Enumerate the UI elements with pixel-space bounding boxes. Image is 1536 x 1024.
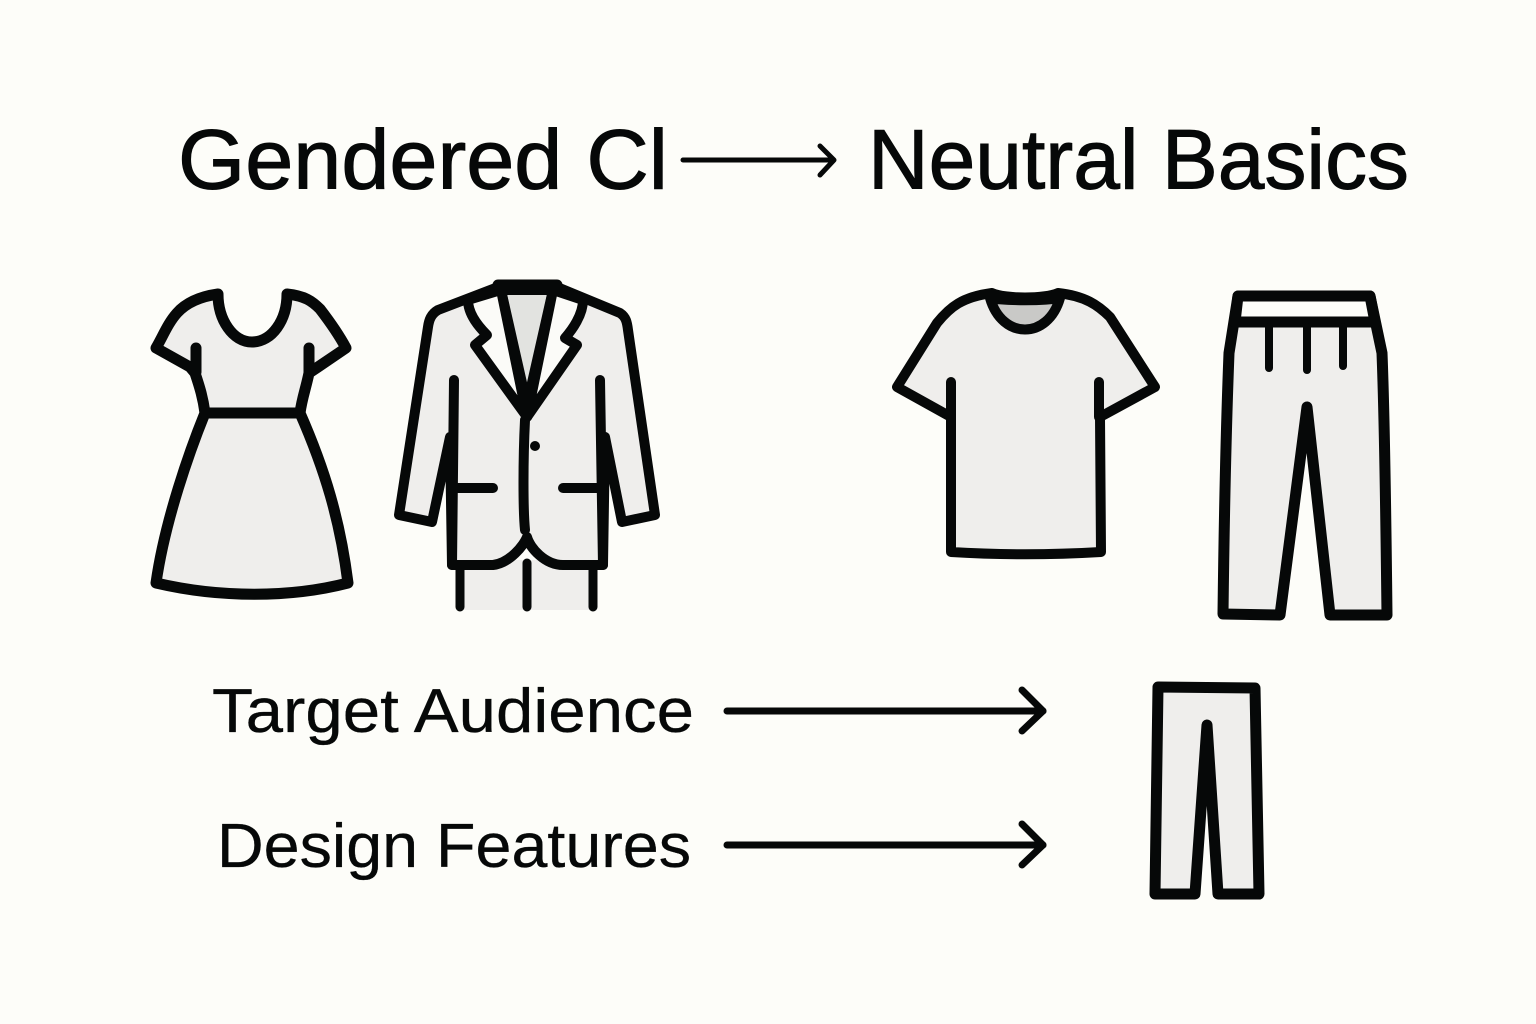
label: design features: Design Features (217, 812, 691, 881)
blazer centre shirt (501, 290, 553, 405)
title arrow (683, 146, 834, 175)
icon: dress (156, 294, 348, 594)
blazer right lapel (527, 290, 583, 417)
arrow: design features (727, 824, 1043, 865)
arrow: target audience (727, 690, 1043, 731)
title: right: Neutral Basics (868, 112, 1409, 206)
icon: t-shirt (897, 293, 1155, 554)
icon: blazer (399, 285, 655, 610)
title: left: Gendered Cl (178, 112, 668, 206)
blazer trouser lines (460, 563, 593, 607)
icon: wide trousers (1223, 296, 1387, 615)
icon: slim trousers (1155, 687, 1259, 894)
blazer sleeves and shoulders (399, 287, 655, 565)
blazer left lapel (468, 290, 527, 417)
trousers under blazer (460, 560, 593, 610)
label: target audience: Target Audience (212, 677, 694, 746)
